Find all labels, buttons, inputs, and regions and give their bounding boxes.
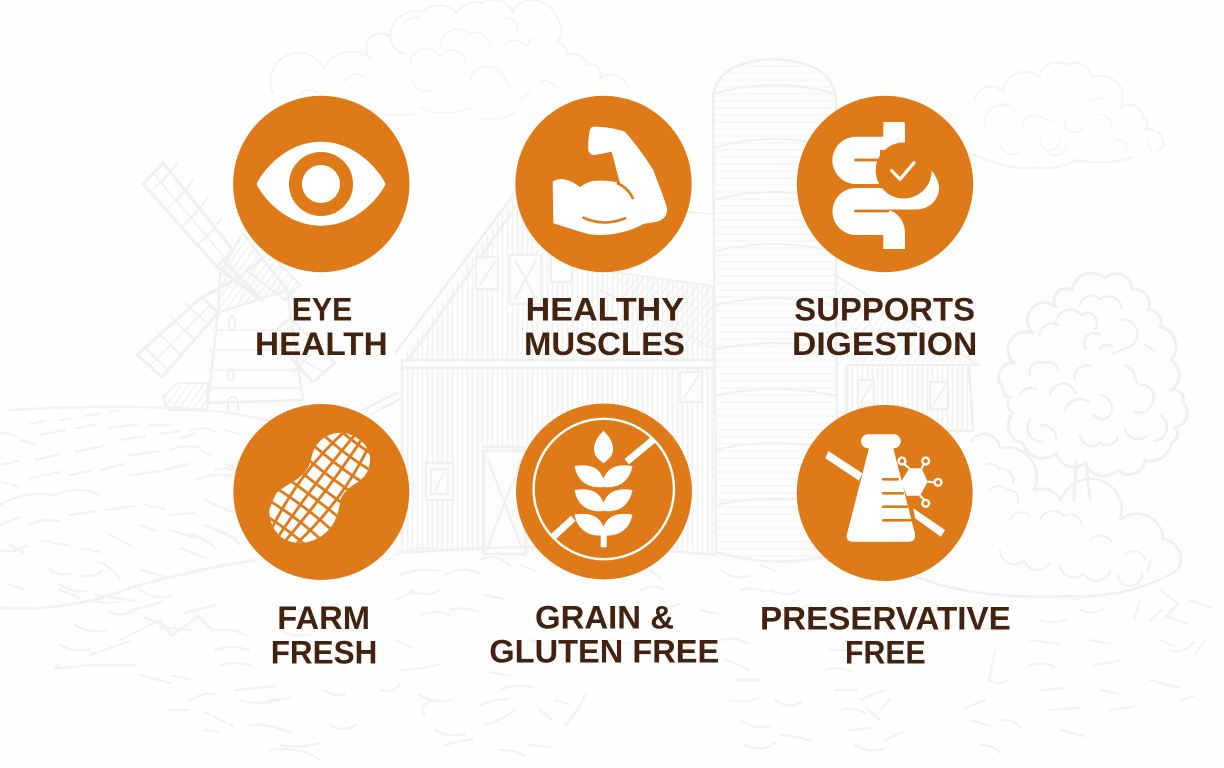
panel: eye health bbox=[233, 96, 410, 362]
icon: flexed bicep bbox=[515, 96, 692, 272]
label: supports digestion: DIGESTION bbox=[792, 326, 977, 362]
icon: crossed-out wheat bbox=[516, 404, 692, 580]
illustration: tree bbox=[999, 273, 1187, 500]
panel: healthy muscles bbox=[515, 96, 692, 362]
illustration: field furrows bbox=[0, 407, 1212, 760]
label: grain and gluten free: GLUTEN FREE bbox=[489, 634, 719, 670]
icon: crossed-out flask and molecule bbox=[797, 405, 973, 581]
label: eye health: HEALTH bbox=[255, 326, 388, 362]
label: preservative free bbox=[760, 600, 1011, 670]
label: grain and gluten free: GRAIN & bbox=[535, 599, 674, 635]
icon: peanut bbox=[232, 394, 409, 582]
label: farm fresh: FARM bbox=[277, 600, 370, 636]
label: healthy muscles bbox=[524, 292, 685, 362]
label: preservative free: PRESERVATIVE bbox=[760, 600, 1011, 636]
label: eye health bbox=[255, 292, 388, 362]
illustration: small barn annex bbox=[835, 275, 979, 432]
label: healthy muscles: HEALTHY bbox=[526, 292, 684, 328]
panel: farm fresh bbox=[232, 394, 409, 670]
panel: grain and gluten free bbox=[489, 404, 719, 670]
icon: eye bbox=[233, 96, 410, 272]
illustration: windmill bbox=[137, 162, 335, 410]
illustration: bushes bbox=[860, 434, 1181, 597]
label: eye health: EYE bbox=[292, 292, 352, 328]
panel: supports digestion bbox=[792, 96, 977, 362]
label: farm fresh bbox=[271, 600, 377, 670]
label: farm fresh: FRESH bbox=[271, 634, 377, 670]
illustration: clouds bbox=[270, 0, 1163, 168]
illustration: silo bbox=[713, 59, 838, 562]
label: preservative free: FREE bbox=[845, 634, 926, 670]
icon: intestine with check bbox=[797, 96, 973, 272]
panel: preservative free bbox=[760, 405, 1011, 670]
label: supports digestion: SUPPORTS bbox=[794, 292, 975, 328]
illustration: barn bbox=[359, 193, 715, 555]
label: grain and gluten free bbox=[489, 599, 719, 670]
label: supports digestion bbox=[792, 292, 977, 362]
label: healthy muscles: MUSCLES bbox=[524, 326, 685, 362]
